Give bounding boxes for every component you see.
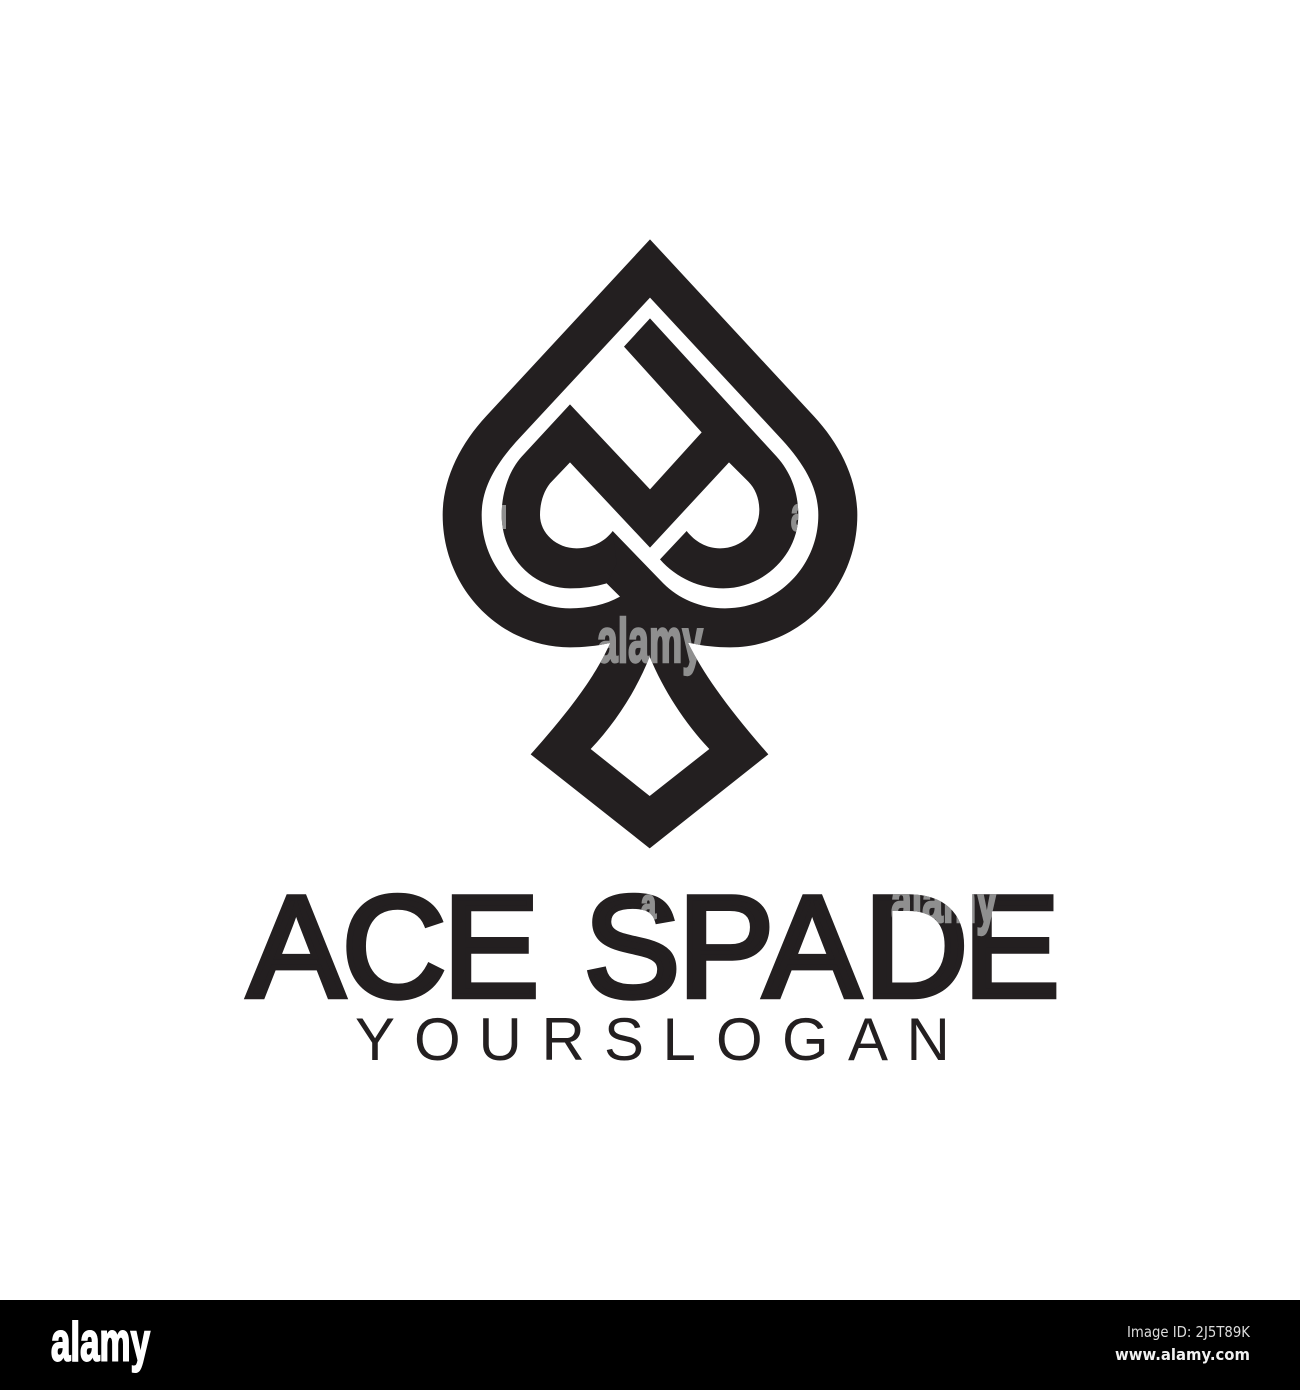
slogan: YOURSLOGAN (355, 1006, 950, 1073)
watermark: over brand name: alamy (891, 867, 997, 936)
brand name: ACE SPADE (248, 866, 1060, 1027)
website: www.alamy.com (1115, 1345, 1250, 1364)
watermark: fragment on right lobe: a (791, 488, 806, 540)
footer bar (0, 1300, 1300, 1390)
spade head with interlaced lines (443, 239, 857, 647)
watermark: fragment on letter S: a (641, 880, 656, 927)
footer logo: alamy (51, 1310, 150, 1372)
watermark: centre of logo: alamy (597, 607, 703, 676)
spade stem with diamond cut-out (531, 627, 768, 848)
spade logo icon (443, 239, 857, 848)
image id: Image ID: 2J5T89K (1127, 1323, 1251, 1341)
watermark: fragment on left lobe (502, 505, 506, 529)
